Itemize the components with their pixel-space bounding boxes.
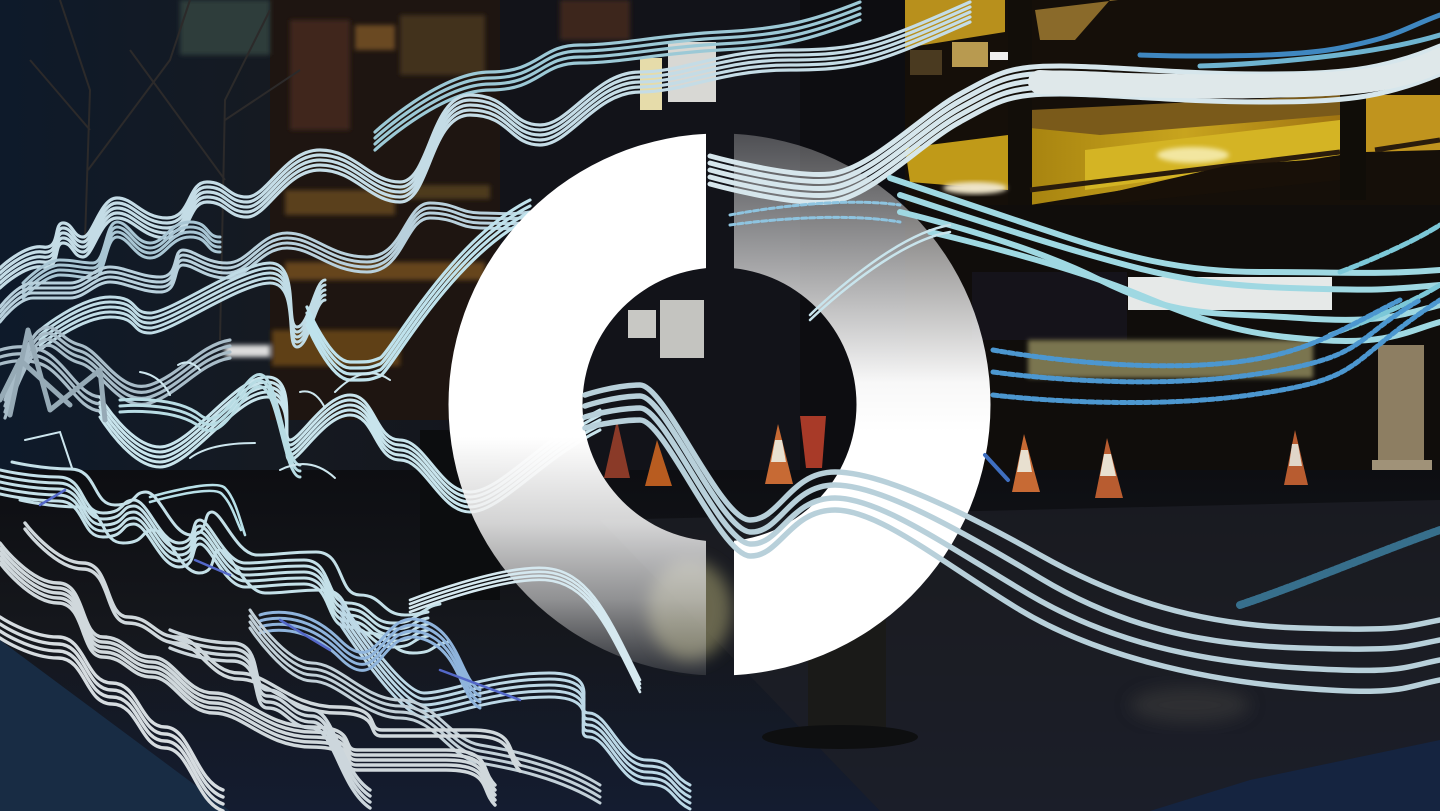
light trails: foreground over the ring [410, 15, 1440, 692]
trail: small blue streak beside ring [985, 455, 1008, 480]
trail: thin arc entering the ring [810, 225, 950, 320]
trail: violet accents [40, 490, 520, 700]
trail: large wave across lower right [585, 385, 1440, 691]
trail: lower diagonal three [250, 610, 600, 803]
ring logo [448, 134, 990, 676]
trail: short wave above lower bundle [150, 485, 245, 535]
trail: grey lower band [0, 523, 520, 805]
building right: lit yellow upper floors [905, 0, 1440, 490]
trail: bottom middle [170, 630, 370, 808]
light trails: left bundles [0, 2, 970, 811]
trail: small curve lower left of ring [410, 568, 640, 692]
trail: crossing band [260, 612, 480, 708]
trail: bottom corner [0, 617, 223, 811]
trail: blue band at top right [1140, 15, 1440, 66]
trail: lower diagonal two [340, 600, 690, 809]
bare trees at upper left [30, 0, 300, 340]
trail: middle row [100, 377, 600, 512]
trail: rising strands at far right [1330, 225, 1440, 335]
trail: cyan bundle right [890, 178, 1440, 341]
traffic cones [604, 416, 1308, 498]
building left: warm windows [180, 0, 630, 366]
trail: third row [0, 203, 530, 322]
trail: upper long [0, 2, 970, 288]
road surface [0, 470, 1440, 811]
trail: middle crossing [120, 374, 300, 477]
trail: left cluster [0, 327, 230, 418]
trail: upper diagonal [375, 2, 860, 150]
trail: lower right blue streak [1240, 530, 1440, 605]
trail: solid band at upper right [1040, 60, 1440, 86]
signs and lit ground-floor window [972, 272, 1332, 378]
trail: upper right strands [710, 46, 1440, 202]
bright window panels behind logo [628, 42, 716, 358]
ring: right half fading upward [734, 134, 990, 676]
trail: faint strands across ring top [730, 202, 900, 225]
trail: low blue beads [993, 300, 1440, 403]
stone column [1372, 345, 1432, 476]
trail: jagged strokes at far left [0, 330, 105, 420]
trail: loose arcs [25, 362, 390, 478]
trail: lower diagonal one [0, 462, 448, 653]
trail: fourth row [40, 263, 325, 350]
trail: dip and rise near the ring [307, 200, 530, 380]
ring: left half fading downward [448, 134, 706, 675]
trail: second row [23, 222, 220, 298]
street post [420, 430, 918, 749]
